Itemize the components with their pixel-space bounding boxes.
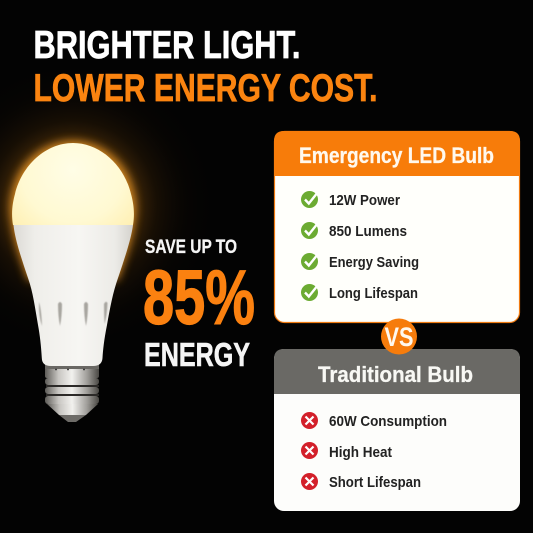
savings callout: ENERGY: [144, 336, 250, 373]
feature: 850 lumens: 850 Lumens: [329, 223, 407, 240]
panel: emergency LED bulb: [274, 131, 520, 322]
drawback: 60W consumption: 60W Consumption: [329, 413, 447, 430]
feature: energy saving: Energy Saving: [329, 254, 419, 271]
title: BRIGHTER LIGHT.: [34, 24, 300, 67]
drawback: short lifespan: Short Lifespan: [329, 474, 421, 491]
panel: traditional bulb: [274, 349, 520, 511]
feature: energy saving: [301, 253, 419, 271]
savings callout: [143, 236, 255, 373]
feature: long lifespan: [301, 284, 418, 302]
savings callout: 85%: [143, 255, 255, 341]
feature: 12W power: 12W Power: [329, 192, 400, 209]
drawback: short lifespan: [301, 473, 421, 491]
VS badge: [381, 318, 417, 354]
bulb white body: [14, 225, 133, 366]
panel header: emergency LED bulb: [274, 131, 520, 176]
panel header: traditional bulb: [274, 349, 520, 394]
icon: light bulb: [12, 143, 134, 422]
panel header: emergency LED bulb: Emergency LED Bulb: [299, 143, 494, 168]
feature: 12W power: [301, 191, 400, 209]
VS badge: VS: [384, 322, 414, 352]
bulb glowing globe: [12, 143, 134, 225]
feature: long lifespan: Long Lifespan: [329, 285, 418, 302]
savings callout: SAVE UP TO: [145, 236, 237, 258]
title: [34, 24, 378, 110]
drawback: high heat: [301, 442, 392, 461]
bulb screw base: [45, 364, 99, 422]
drawback: high heat: High Heat: [329, 444, 392, 461]
title: LOWER ENERGY COST.: [34, 67, 378, 110]
panel header: traditional bulb: Traditional Bulb: [318, 362, 473, 387]
feature: 850 lumens: [301, 222, 407, 240]
